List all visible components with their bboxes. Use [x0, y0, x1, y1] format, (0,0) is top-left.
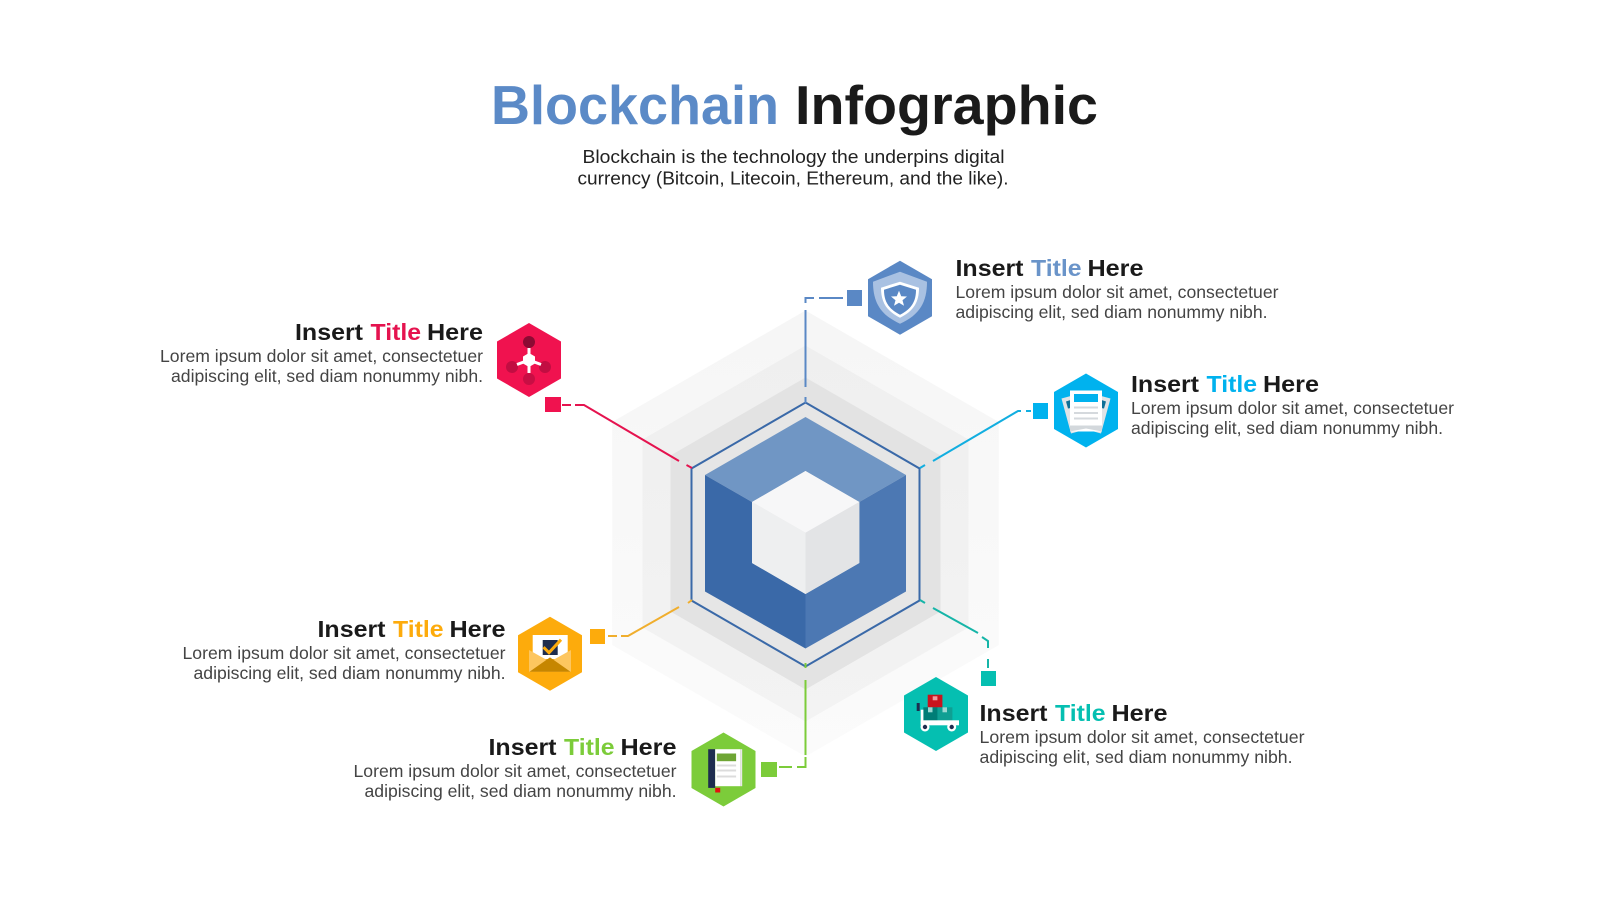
icon: network nodes [497, 323, 561, 397]
text block: orange [182, 616, 506, 683]
text block: orange: Insert [318, 616, 386, 642]
text block: green: Lorem ipsum dolor sit amet, consectetuer [354, 761, 677, 781]
text block: cyan: Lorem ipsum dolor sit amet, consectetuer [1131, 398, 1454, 418]
text block: teal: Here [1112, 700, 1168, 726]
icon: documents [1054, 374, 1118, 448]
text block: cyan: Insert [1131, 371, 1199, 397]
central cube [705, 417, 906, 648]
connector: cyan [920, 411, 1031, 468]
text block: blue: Title [1031, 255, 1082, 281]
icon: shield [868, 261, 932, 335]
text block: pink: Lorem ipsum dolor sit amet, consectetuer [160, 346, 483, 366]
icon: envelope [518, 617, 582, 691]
text block: green: Here [620, 734, 676, 760]
text block: blue [956, 255, 1279, 322]
text block: orange: Lorem ipsum dolor sit amet, consectetuer [182, 643, 506, 663]
text block: blue: Here [1088, 255, 1144, 281]
text block: orange: adipiscing elit, sed diam nonummy nibh. [194, 663, 506, 683]
text block: teal: Title [1055, 700, 1106, 726]
text block: green: adipiscing elit, sed diam nonummy nibh. [364, 781, 676, 801]
text block: pink [160, 319, 483, 386]
icon: delivery cart [904, 677, 968, 751]
connector: green [779, 663, 806, 767]
central layered hexagon [612, 310, 999, 756]
text block: pink: Here [427, 319, 483, 345]
connector: blue [806, 298, 843, 403]
text block: green: Insert [488, 734, 557, 760]
text block: blue: Insert [956, 255, 1024, 281]
icon: book [692, 732, 756, 806]
connector: orange [608, 600, 692, 636]
text block: blue: adipiscing elit, sed diam nonummy nibh. [956, 302, 1268, 322]
text block: teal: Lorem ipsum dolor sit amet, consectetuer [980, 727, 1305, 747]
subtitle [578, 146, 1008, 188]
marker squares [545, 290, 1048, 777]
title: Infographic [795, 74, 1098, 136]
connector: pink [562, 405, 692, 468]
text block: blue: Lorem ipsum dolor sit amet, consectetuer [956, 282, 1279, 302]
text block: cyan: Title [1206, 371, 1257, 397]
text block: pink: Title [370, 319, 421, 345]
text block: pink: Insert [295, 319, 363, 345]
text block: green: Title [564, 734, 614, 760]
text block: teal: Insert [980, 700, 1048, 726]
text block: teal: adipiscing elit, sed diam nonummy nibh. [980, 747, 1292, 767]
connector: teal [920, 600, 988, 668]
text block: orange: Title [393, 616, 444, 642]
text block: pink: adipiscing elit, sed diam nonummy nibh. [171, 366, 483, 386]
text block: cyan [1131, 371, 1454, 438]
title: Blockchain [491, 74, 779, 136]
text block: cyan: Here [1263, 371, 1319, 397]
text block: cyan: adipiscing elit, sed diam nonummy nibh. [1131, 418, 1443, 438]
title [491, 74, 1098, 136]
subtitle: currency (Bitcoin, Litecoin, Ethereum, and the like). [578, 168, 1008, 188]
text block: orange: Here [450, 616, 506, 642]
subtitle: Blockchain is the technology the underpins digital [582, 146, 1004, 167]
text block: green [354, 734, 677, 801]
text block: teal [980, 700, 1305, 767]
